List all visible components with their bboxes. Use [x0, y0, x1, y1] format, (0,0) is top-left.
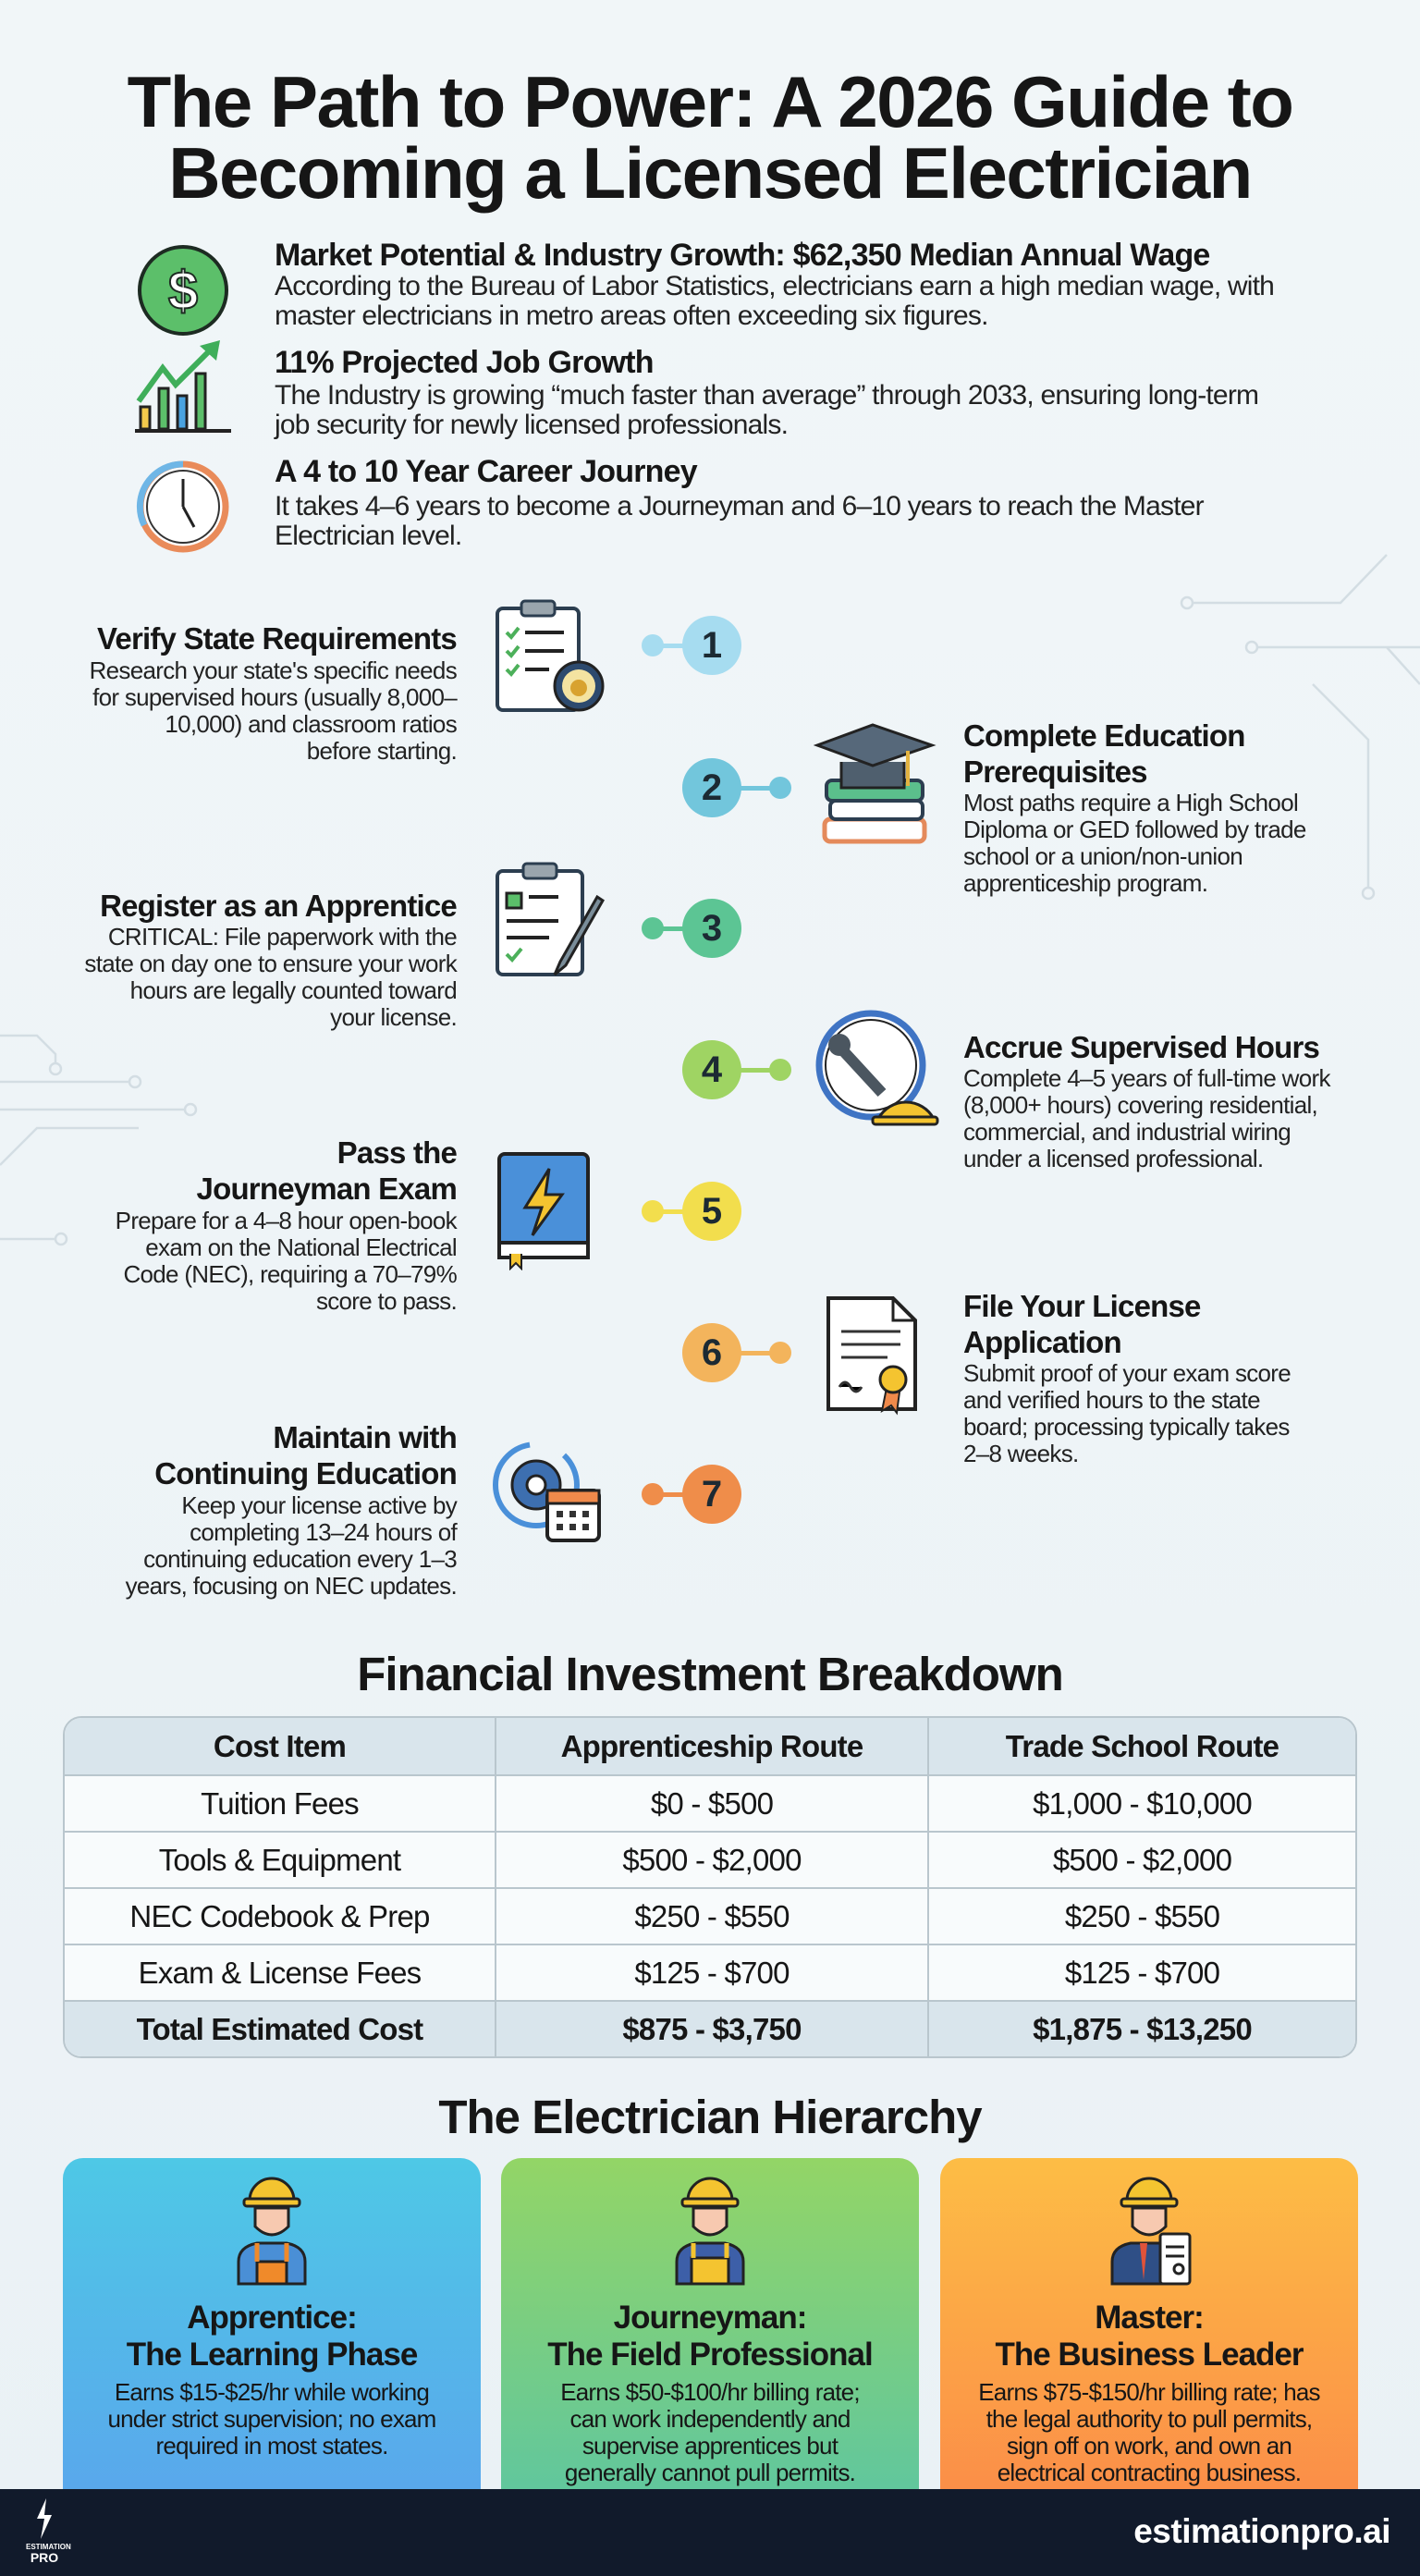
card: master: sign off on work, and own an	[1007, 2432, 1291, 2459]
cost table: Tuition Fees	[201, 1786, 359, 1821]
card: journeyman: Earns $50-$100/hr billing rate;	[560, 2378, 860, 2406]
cost table: $125 - $700	[1065, 1956, 1219, 1990]
cost table: NEC Codebook & Prep	[129, 1899, 430, 1933]
card: master: Earns $75-$150/hr billing rate; has	[978, 2378, 1320, 2406]
card: apprentice: required in most states.	[155, 2432, 388, 2459]
step 4 text: commercial, and industrial wiring	[963, 1118, 1291, 1146]
card: journeyman: supervise apprentices but	[582, 2432, 838, 2459]
icon: growth chart	[135, 340, 231, 433]
step 2 text	[963, 718, 1306, 897]
title: Becoming a Licensed Electrician	[168, 132, 1252, 214]
icon: journeyman worker	[675, 2177, 745, 2286]
step 5 marker: 5	[702, 1191, 722, 1232]
icon: clock	[137, 460, 229, 553]
cost table: Exam & License Fees	[139, 1956, 421, 1990]
step 4 marker: 4	[702, 1049, 722, 1090]
logo: PRO	[31, 2550, 58, 2565]
card: apprentice: The Learning Phase	[127, 2337, 417, 2373]
card: journeyman: The Field Professional	[547, 2337, 873, 2373]
step 4 marker	[682, 1040, 791, 1099]
stat: career journey: It takes 4–6 years to become a Journeyman and 6–10 years to reach the Master	[275, 491, 1204, 521]
step 2 marker: 2	[702, 767, 722, 808]
step 6 text	[963, 1289, 1291, 1467]
stat: median wage: According to the Bureau of Labor Statistics, electricians earn a high median wage, with	[275, 271, 1274, 301]
step 4 text: (8,000+ hours) covering residential,	[963, 1091, 1317, 1119]
title	[128, 61, 1292, 214]
cost table: Trade School Route	[1006, 1729, 1279, 1762]
step 6 text: File Your License	[963, 1289, 1201, 1323]
icon: dollar	[138, 245, 228, 336]
step 2 text: apprenticeship program.	[963, 869, 1207, 897]
card: apprentice: Apprentice:	[187, 2300, 357, 2336]
step 3 text	[84, 889, 458, 1031]
icon: clock wrench hardhat	[815, 1010, 939, 1126]
stat: job growth: 11% Projected Job Growth	[275, 345, 654, 380]
step 3 text: state on day one to ensure your work	[84, 950, 457, 977]
step 6 marker	[682, 1323, 791, 1382]
cost table: Cost Item	[214, 1729, 346, 1762]
step 7 text: completing 13–24 hours of	[190, 1518, 457, 1546]
stat: job growth: The Industry is growing “much faster than average” through 2033, ensuring long-term	[275, 380, 1258, 411]
step 1 marker: 1	[702, 625, 722, 666]
card: apprentice: under strict supervision; no exam	[107, 2405, 436, 2433]
step 5 text: Code (NEC), requiring a 70–79%	[123, 1260, 457, 1288]
step 6 marker: 6	[702, 1332, 722, 1373]
step 1 text: 10,000) and classroom ratios	[165, 710, 457, 738]
cost table: $1,000 - $10,000	[1033, 1786, 1252, 1821]
icon: gear and calendar	[493, 1442, 601, 1542]
step 7 text: continuing education every 1–3	[143, 1545, 457, 1573]
step 1 text	[90, 621, 458, 765]
step 1 text: Research your state's specific needs	[90, 656, 457, 684]
icon: grad cap and books	[814, 723, 936, 843]
cost table: $875 - $3,750	[622, 2012, 802, 2046]
step 1 marker	[642, 616, 741, 675]
step 5 text: Pass the	[337, 1135, 457, 1170]
card: journeyman: Journeyman:	[614, 2300, 806, 2336]
cost table: $500 - $2,000	[1053, 1843, 1231, 1877]
step 4 text: Complete 4–5 years of full-time work	[963, 1064, 1330, 1092]
step 5 text: exam on the National Electrical	[145, 1233, 457, 1261]
step 2 marker	[682, 758, 791, 817]
step 6 text: board; processing typically takes	[963, 1413, 1290, 1441]
icon: master with clipboard	[1111, 2177, 1191, 2286]
step 1 text: for supervised hours (usually 8,000–	[92, 683, 457, 711]
step 5 text: Prepare for a 4–8 hour open-book	[116, 1207, 457, 1234]
step 6 text: Application	[963, 1325, 1121, 1359]
card: apprentice	[63, 2158, 481, 2509]
stat: median wage: Market Potential & Industry Growth: $62,350 Median Annual Wage	[275, 238, 1210, 273]
card: master	[940, 2158, 1358, 2509]
card: apprentice: Earns $15-$25/hr while working	[115, 2378, 429, 2406]
step 7 marker	[642, 1465, 741, 1524]
stat: job growth	[135, 340, 1258, 440]
step 7 text: Continuing Education	[154, 1456, 457, 1490]
card: journeyman	[501, 2158, 919, 2509]
card: journeyman: generally cannot pull permits.	[565, 2459, 855, 2486]
cost table: $1,875 - $13,250	[1033, 2012, 1252, 2046]
cost table: Tools & Equipment	[159, 1843, 400, 1877]
stat: median wage: master electricians in metro areas often exceeding six figures.	[275, 301, 988, 331]
footer	[0, 2489, 1420, 2576]
step 2 text: Most paths require a High School	[963, 789, 1298, 816]
step 6 text: Submit proof of your exam score	[963, 1359, 1291, 1387]
step 2 text: Prerequisites	[963, 754, 1147, 789]
logo: ESTIMATION	[26, 2543, 71, 2551]
cost table: $125 - $700	[634, 1956, 790, 1990]
heading: hierarchy: The Electrician Hierarchy	[438, 2091, 982, 2143]
card: master: Master:	[1095, 2300, 1204, 2336]
step 5 text	[116, 1135, 458, 1315]
step 5 text: Journeyman Exam	[197, 1171, 457, 1206]
step 3 marker	[642, 899, 741, 958]
icon: apprentice worker	[237, 2177, 307, 2286]
step 7 text	[126, 1420, 458, 1600]
step 5 marker	[642, 1182, 741, 1241]
step 3 text: Register as an Apprentice	[100, 889, 457, 923]
card: journeyman: can work independently and	[569, 2405, 850, 2433]
step 1 text: before starting.	[307, 737, 457, 765]
step 6 text: 2–8 weeks.	[963, 1440, 1079, 1467]
step 3 text: CRITICAL: File paperwork with the	[108, 923, 457, 951]
step 3 marker: 3	[702, 908, 722, 949]
step 2 text: Diploma or GED followed by trade	[963, 816, 1306, 843]
card: master: electrical contracting business.	[998, 2459, 1301, 2486]
cost table	[63, 1716, 1357, 2058]
cost table: $250 - $550	[1065, 1899, 1219, 1933]
step 4 text: Accrue Supervised Hours	[963, 1030, 1319, 1064]
cost table: $500 - $2,000	[622, 1843, 802, 1877]
icon: dollar: $	[168, 261, 198, 321]
icon: clipboard with seal	[496, 599, 605, 712]
stat: career journey	[137, 454, 1204, 553]
card: master: The Business Leader	[995, 2337, 1304, 2373]
step 6 text: and verified hours to the state	[963, 1386, 1260, 1414]
title: The Path to Power: A 2026 Guide to	[128, 61, 1292, 142]
stat: job growth: job security for newly licensed professionals.	[275, 410, 788, 440]
step 7 text: years, focusing on NEC updates.	[126, 1572, 457, 1600]
heading: financial breakdown: Financial Investment Breakdown	[357, 1648, 1063, 1700]
step 3 text: your license.	[330, 1003, 457, 1031]
step 2 text: school or a union/non-union	[963, 842, 1242, 870]
step 7 text: Keep your license active by	[181, 1491, 457, 1519]
step 2 text: Complete Education	[963, 718, 1245, 753]
stat: median wage	[138, 238, 1274, 336]
cost table: Total Estimated Cost	[137, 2012, 422, 2046]
icon: clipboard with pen	[496, 862, 605, 976]
logo	[26, 2498, 71, 2565]
step 7 text: Maintain with	[273, 1420, 457, 1454]
step 4 text	[963, 1030, 1331, 1172]
step 4 text: under a licensed professional.	[963, 1145, 1263, 1172]
icon: certificate document	[826, 1296, 917, 1415]
cost table: Apprenticeship Route	[561, 1729, 863, 1762]
step 5 text: score to pass.	[316, 1287, 457, 1315]
step 7 marker: 7	[702, 1474, 722, 1515]
icon: code book with bolt	[497, 1152, 590, 1270]
step 3 text: hours are legally counted toward	[130, 976, 457, 1004]
cost table: $0 - $500	[651, 1786, 773, 1821]
website: estimationpro.ai	[1133, 2512, 1390, 2550]
card: master: the legal authority to pull permits,	[986, 2405, 1312, 2433]
stat: career journey: Electrician level.	[275, 521, 461, 551]
stat: career journey: A 4 to 10 Year Career Journey	[275, 454, 697, 489]
step 1 text: Verify State Requirements	[97, 621, 457, 656]
cost table: $250 - $550	[634, 1899, 790, 1933]
